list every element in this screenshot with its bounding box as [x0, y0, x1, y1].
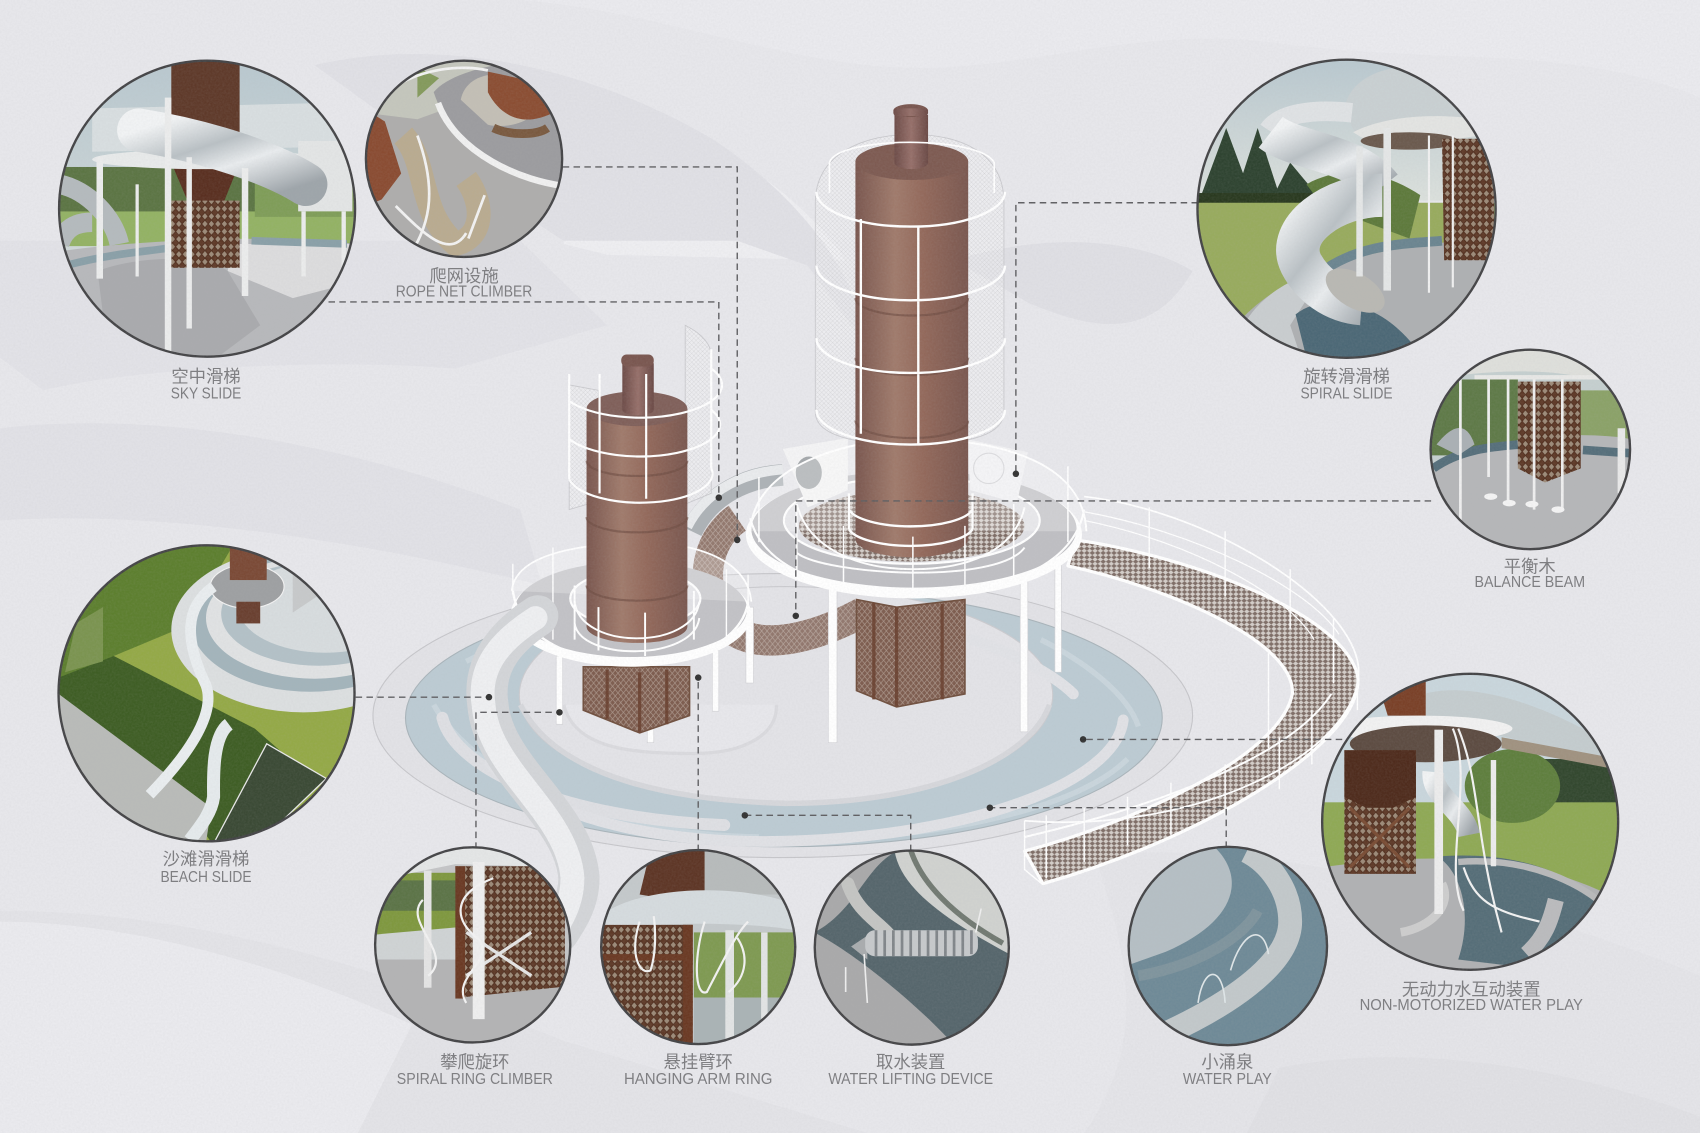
callout: balance beam [1430, 349, 1631, 550]
label: rope net climber: ROPE NET CLIMBER [396, 284, 532, 301]
callout: water lifting device [814, 850, 1009, 1045]
small platform front railing [513, 548, 748, 664]
net [214, 744, 326, 844]
path [59, 694, 211, 842]
callout: rope net climber [365, 61, 569, 260]
gravel deck band [751, 471, 1077, 588]
support columns [556, 564, 1061, 743]
label: hanging arm ring: HANGING ARM RING [624, 1071, 772, 1088]
walkway handrails [1025, 497, 1359, 822]
brown mesh tower bases [583, 600, 965, 733]
label: water lifting device [828, 1052, 993, 1088]
big platform [746, 438, 1086, 598]
frame and slide [1344, 750, 1416, 874]
raised disc under small tower [564, 705, 776, 754]
label: water lifting device: WATER LIFTING DEVICE [828, 1071, 993, 1088]
beach slide tube [483, 616, 579, 932]
tower top [1375, 673, 1426, 716]
outer paved ring [373, 574, 1193, 858]
label: beach slide: 沙滩滑滑梯 [163, 849, 249, 869]
silver upper slide tube [687, 469, 783, 531]
label: rope net climber: 爬网设施 [429, 266, 499, 286]
rear railing [512, 542, 751, 602]
circular grating [799, 490, 1025, 562]
callout: water play [1129, 847, 1327, 1045]
tower floor collar [849, 493, 973, 546]
label: spiral ring climber: 攀爬旋环 [440, 1052, 510, 1072]
label: water play: 小涌泉 [1201, 1052, 1253, 1072]
elevated deck [1352, 68, 1436, 92]
label: water play [1183, 1052, 1272, 1088]
callout: spiral slide [1197, 60, 1496, 358]
collar rails [575, 585, 699, 656]
platform rim [746, 471, 1082, 598]
platform and tower [210, 565, 284, 608]
chimney [894, 115, 928, 169]
label: sky slide [171, 367, 241, 402]
columns [1434, 730, 1443, 914]
grass shadow band [59, 656, 314, 842]
deck mesh rail [1400, 690, 1601, 756]
mesh panel [602, 925, 693, 1045]
cables [1453, 729, 1540, 932]
columns [1383, 128, 1391, 291]
pine trees [1201, 128, 1317, 195]
base discs [1484, 493, 1497, 500]
brown frame [1518, 382, 1581, 482]
label: beach slide [160, 849, 252, 886]
ring spiral [418, 878, 493, 1003]
label: spiral slide [1300, 367, 1393, 402]
rear mesh cage [815, 134, 1004, 445]
big tower base frame [857, 600, 965, 707]
callout: spiral ring climber [375, 847, 570, 1042]
cage mesh panels [569, 385, 598, 510]
label: beach slide: BEACH SLIDE [160, 869, 252, 886]
label: rope net climber [396, 266, 532, 301]
small rusted tower [569, 325, 722, 656]
label: spiral slide: SPIRAL SLIDE [1300, 385, 1393, 402]
central plaza [519, 587, 1053, 803]
ribbed screw device [851, 930, 978, 960]
back railing [750, 439, 1086, 531]
frame [1442, 139, 1494, 260]
label: spiral ring climber: SPIRAL RING CLIMBER [397, 1071, 553, 1088]
label: balance beam: 平衡木 [1504, 556, 1556, 576]
label: non-motorized water play: 无动力水互动装置 [1402, 979, 1541, 999]
callout: beach slide [59, 545, 436, 844]
lower brown mesh ramp between towers [708, 518, 862, 640]
label: non-motorized water play: NON-MOTORIZED WATER PLAY [1360, 997, 1583, 1014]
plaza rings [171, 548, 436, 712]
inner floor [784, 477, 1040, 564]
label: sky slide: SKY SLIDE [171, 385, 241, 402]
curved stepping strips [442, 718, 724, 825]
perforated panels with holes [783, 438, 1028, 507]
label: hanging arm ring: 悬挂臂环 [664, 1052, 733, 1072]
columns [473, 862, 485, 1019]
columns [725, 930, 734, 1039]
label: balance beam [1474, 556, 1585, 591]
big platform front railing [750, 466, 1084, 598]
white cage rings [816, 192, 1005, 445]
small platform [511, 542, 751, 667]
tower body [855, 162, 968, 557]
tower [171, 62, 240, 132]
slides [150, 587, 214, 795]
label: sky slide: 空中滑梯 [171, 367, 241, 387]
label: water play: WATER PLAY [1183, 1071, 1272, 1088]
site plan: plaza and water rings [373, 574, 1193, 858]
deck [92, 152, 298, 170]
callout: non-motorized water play [1322, 673, 1621, 970]
tower body [587, 409, 687, 643]
columns [96, 98, 346, 358]
water ring [405, 589, 1162, 847]
callout: hanging arm ring [601, 850, 796, 1045]
spiral mesh walkway [1025, 497, 1359, 885]
label: balance beam: BALANCE BEAM [1474, 574, 1585, 591]
mesh panel [455, 866, 565, 997]
deck [434, 66, 561, 182]
callout: sky slide [59, 61, 358, 358]
white cage [569, 349, 722, 503]
tube slide [298, 141, 352, 211]
label: spiral slide: 旋转滑滑梯 [1303, 367, 1390, 387]
big rusted tower [815, 104, 1005, 557]
label: spiral ring climber [397, 1052, 553, 1088]
railings [395, 66, 488, 246]
deck plate [1328, 716, 1512, 742]
deck plate [601, 890, 796, 930]
hanging rings [635, 916, 748, 993]
label: hanging arm ring [624, 1052, 772, 1088]
columns [1460, 379, 1562, 537]
small tower base frame [583, 667, 690, 733]
label: non-motorized water play [1360, 979, 1583, 1014]
label: water lifting device: 取水装置 [876, 1052, 945, 1072]
upper shaded lawn [59, 545, 233, 694]
slide tube [1268, 111, 1352, 130]
chimney [622, 363, 654, 415]
leader lines with end dots [329, 167, 1431, 851]
